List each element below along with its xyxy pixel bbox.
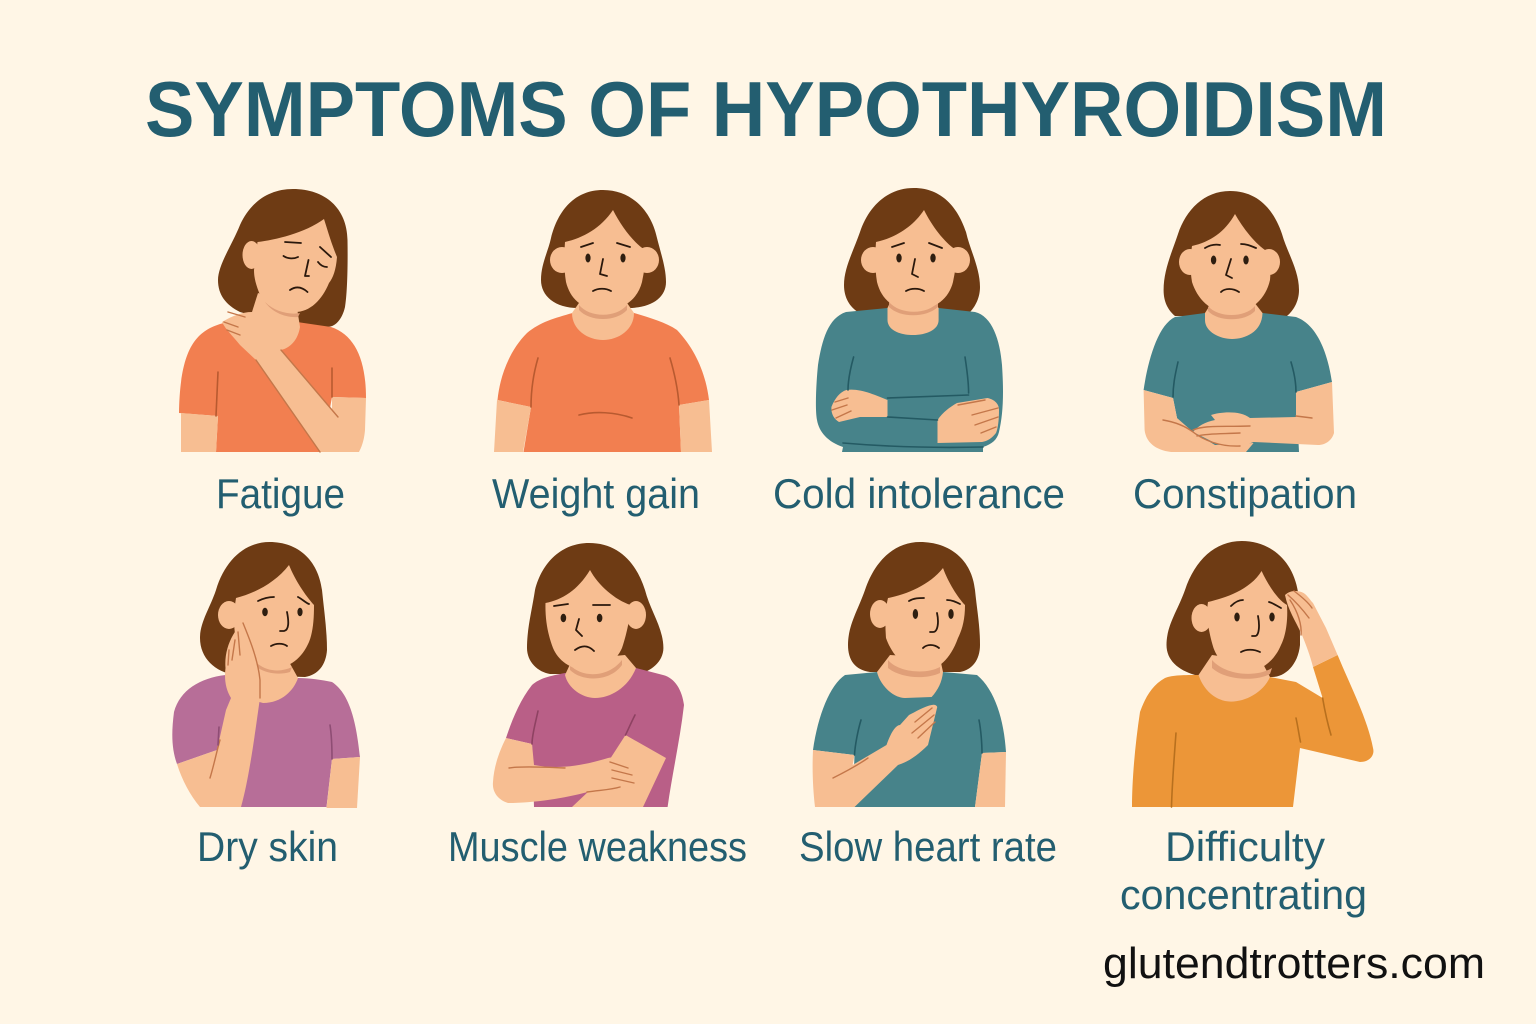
icon: muscle weakness figure (493, 543, 684, 807)
panel: difficulty concentrating (1120, 541, 1373, 918)
label: difficulty concentrating: Difficulty (1165, 823, 1325, 870)
website credit: glutendtrotters.com (1103, 939, 1485, 988)
panel: cold intolerance (773, 188, 1065, 517)
panel: muscle weakness (448, 543, 747, 870)
panel: weight gain (492, 190, 712, 517)
icon: difficulty concentrating figure (1132, 541, 1373, 807)
label: dry skin: Dry skin (197, 823, 338, 870)
icon: dry skin figure (172, 542, 360, 808)
label: muscle weakness: Muscle weakness (448, 823, 747, 870)
icon: slow heart rate figure (813, 542, 1006, 807)
label: slow heart rate: Slow heart rate (799, 823, 1057, 870)
panel: constipation (1133, 191, 1357, 517)
label: weight gain: Weight gain (492, 470, 700, 517)
panel: dry skin (172, 542, 360, 870)
icon: constipation figure (1144, 191, 1334, 452)
panel: fatigue (179, 189, 366, 517)
title: SYMPTOMS OF HYPOTHYROIDISM (145, 65, 1387, 153)
panel: slow heart rate (799, 542, 1057, 870)
icon: fatigue figure (179, 189, 366, 452)
label: difficulty concentrating (1120, 823, 1367, 918)
icon: weight gain figure (494, 190, 712, 452)
label: fatigue: Fatigue (216, 470, 345, 517)
label: constipation: Constipation (1133, 470, 1357, 517)
label: difficulty concentrating: concentrating (1120, 871, 1367, 918)
icon: cold intolerance figure (816, 188, 1003, 452)
label: cold intolerance: Cold intolerance (773, 470, 1065, 517)
